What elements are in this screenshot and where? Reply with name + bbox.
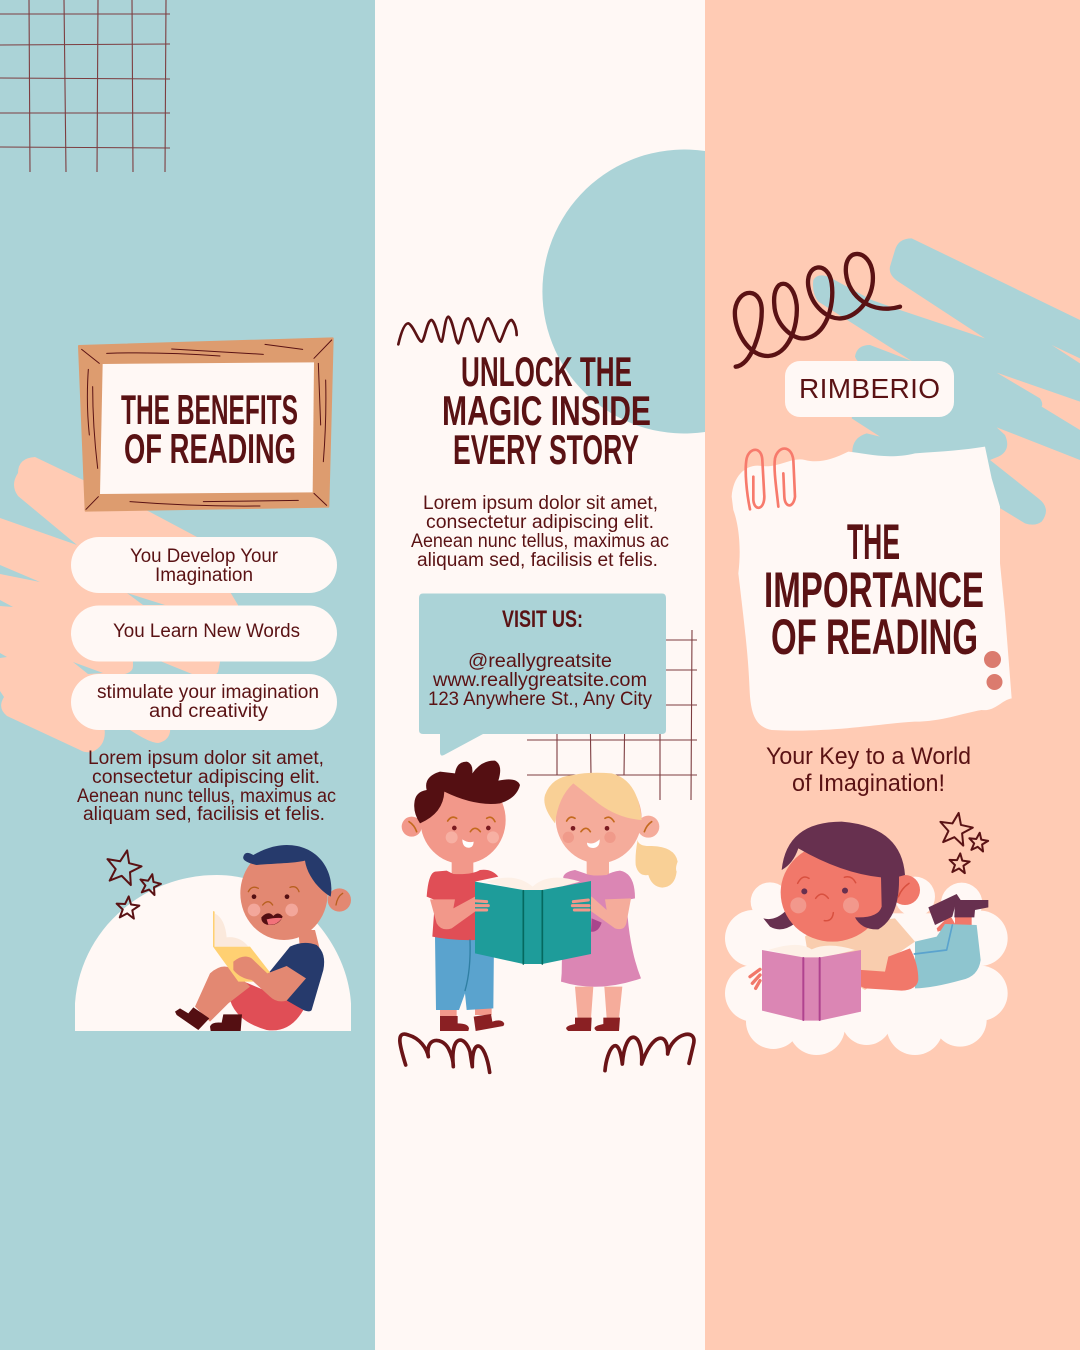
note title: OF READING <box>771 609 978 665</box>
speech bubble: visit us <box>419 594 666 756</box>
tagline: Your Key to a World <box>766 743 971 770</box>
right panel background <box>705 0 1080 1350</box>
pill: develop imagination <box>71 537 337 593</box>
picture frame with title <box>79 338 333 511</box>
center body text <box>411 493 669 571</box>
grass scribbles <box>400 1034 694 1072</box>
pink book <box>762 945 861 1021</box>
boy figure <box>402 761 520 1031</box>
left body text: aliquam sed, facilisis et felis. <box>83 804 325 825</box>
cloud <box>725 877 1008 1055</box>
illustration: two children reading <box>400 761 694 1072</box>
illustration: girl reading on cloud <box>725 810 1008 1055</box>
frame title: THE BENEFITS <box>121 386 298 433</box>
note title: THE <box>847 514 900 570</box>
center body text: aliquam sed, facilisis et felis. <box>417 550 658 571</box>
panel: right peach column <box>705 0 1080 1350</box>
blue circle <box>542 150 705 434</box>
tagline <box>766 743 971 797</box>
center panel background <box>375 0 705 1350</box>
paper clips <box>746 449 795 509</box>
center title: MAGIC INSIDE <box>442 387 651 434</box>
wooden frame <box>79 338 333 511</box>
pill: stimulate imagination <box>71 674 337 730</box>
left body text: Aenean nunc tellus, maximus ac <box>77 786 336 807</box>
left body text: consectetur adipiscing elit. <box>92 767 320 788</box>
stars <box>937 810 989 873</box>
girl figure <box>750 822 988 991</box>
center body text: Lorem ipsum dolor sit amet, <box>423 493 658 514</box>
pill: new words: You Learn New Words <box>113 621 300 642</box>
note dots <box>984 651 1002 690</box>
pill: develop imagination: You Develop Your <box>130 546 279 567</box>
panel: left blue column <box>0 0 375 1350</box>
panel: center cream column <box>375 0 705 1350</box>
tagline: of Imagination! <box>792 770 945 797</box>
spiral scribble <box>735 254 900 367</box>
illustration: boy reading on dome <box>75 845 351 1031</box>
pill: stimulate imagination: and creativity <box>149 701 269 722</box>
zigzag scribble <box>398 317 517 344</box>
pill: new words <box>71 606 337 662</box>
center body text: Aenean nunc tellus, maximus ac <box>411 531 669 552</box>
decorative grid center <box>527 630 697 800</box>
left body text <box>77 748 336 825</box>
speech bubble: visit us: VISIT US: <box>502 606 583 633</box>
center body text: consectetur adipiscing elit. <box>426 512 654 533</box>
pill: stimulate imagination: stimulate your imagination <box>97 682 319 703</box>
speech bubble: visit us: @reallygreatsite <box>468 651 612 672</box>
center title: EVERY STORY <box>453 426 639 473</box>
pill: develop imagination: Imagination <box>155 565 253 586</box>
speech bubble: visit us: 123 Anywhere St., Any City <box>428 689 652 710</box>
blue brush strokes <box>813 238 1080 525</box>
boy figure <box>175 845 351 1031</box>
note title <box>764 514 984 665</box>
stars <box>103 847 163 919</box>
brand pill: RIMBERIO <box>799 373 940 404</box>
center title: UNLOCK THE <box>461 348 632 395</box>
peach brush strokes <box>0 457 238 752</box>
brand pill <box>785 361 954 417</box>
torn paper note <box>732 447 1012 731</box>
center title <box>442 348 651 473</box>
girl figure <box>544 773 678 1031</box>
cream dome <box>75 875 351 1031</box>
teal book <box>472 878 591 964</box>
left body text: Lorem ipsum dolor sit amet, <box>88 748 324 769</box>
left panel background <box>0 0 375 1350</box>
frame title: OF READING <box>124 425 296 472</box>
decorative grid top left <box>0 0 170 172</box>
speech bubble: visit us: www.reallygreatsite.com <box>432 670 647 691</box>
frame title <box>121 386 298 472</box>
